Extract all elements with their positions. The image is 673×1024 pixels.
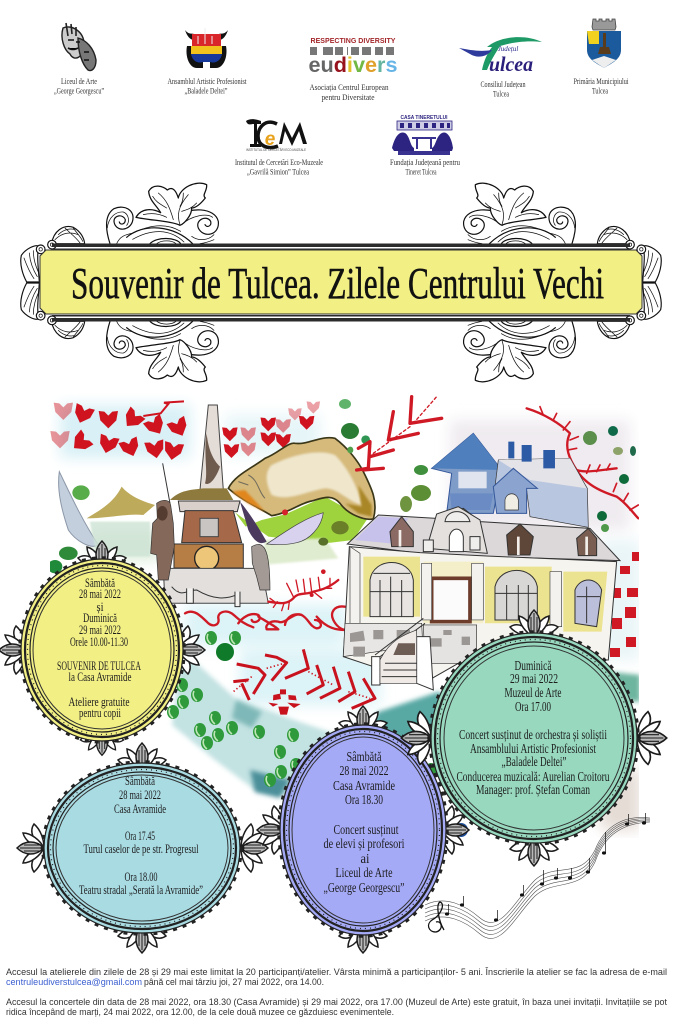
panel: yellow oval xyxy=(0,541,205,755)
label: Primăria Municipiului: Primăria Municipiului xyxy=(574,77,629,86)
text: yellow oval: SOUVENIR DE TULCEA xyxy=(57,658,141,673)
footer notes: Accesul la concertele din data de 28 mai 2022, ora 18.30 (Casa Avramide) și 29 mai 2022, ora 17.00 (Muzeul de Arte) este gratuit, în baza unei invitații. Invitațiile se pot xyxy=(6,997,667,1007)
text: yellow oval: Duminică xyxy=(83,610,117,625)
text: lavender oval: ai xyxy=(360,852,370,867)
text: blue oval xyxy=(79,773,203,897)
text: green oval: Muzeul de Arte xyxy=(504,686,562,701)
logo: Județul Tulcea: ulcea xyxy=(489,52,533,76)
text: blue oval: Casa Avramide xyxy=(114,801,166,816)
footer notes: până cel mai târziu joi, 27 mai 2022, ora 14.00. xyxy=(144,977,324,987)
logo: Casa Tineretului: CASA TINERETULUI xyxy=(400,115,448,121)
text: yellow oval: pentru copii xyxy=(79,705,121,720)
text: lavender oval: de elevi și profesori xyxy=(324,837,405,852)
text: green oval: Duminică xyxy=(514,659,552,674)
text: yellow oval: Orele 10.00-11.30 xyxy=(70,634,128,649)
logo: eudivers: RESPECTING DIVERSITY xyxy=(310,36,396,45)
text: yellow oval: Sâmbătă xyxy=(85,575,115,590)
text: green oval: Concert susținut de orchestra și soliștii xyxy=(459,728,607,743)
frame ornaments xyxy=(0,541,205,755)
title banner xyxy=(21,183,661,382)
label: Primăria Municipiului xyxy=(574,77,629,96)
label: Fundația Județeană pentru Tineret xyxy=(390,158,460,176)
text: green oval: 29 mai 2022 xyxy=(510,672,558,687)
text: blue oval: Sâmbătă xyxy=(125,773,155,788)
water band with lily pads xyxy=(167,631,640,798)
monument xyxy=(151,405,323,607)
frame ornaments xyxy=(401,610,667,866)
text: lavender oval: „George Georgescu” xyxy=(324,881,404,896)
logo: ICEM: INSTITUTUL DE CERCETĂRI ECO-MUZEALE xyxy=(246,148,307,152)
green leaves xyxy=(339,399,636,532)
banner yellow plate xyxy=(40,250,642,314)
music notes xyxy=(445,813,646,921)
label: Ansamblul Artistic Profesionist xyxy=(168,77,247,96)
text: yellow oval: 28 mai 2022 xyxy=(79,586,121,601)
label: Ansamblul Artistic Profesionist: „Baladele Deltei” xyxy=(184,86,228,96)
text: blue oval: Ora 18.00 xyxy=(124,869,158,884)
text: green oval: Manager: prof. Ștefan Coman xyxy=(476,783,590,798)
pale washes xyxy=(60,405,640,830)
frame ornaments xyxy=(17,743,268,953)
footer notes: centruleudiverstulcea@gmail.com xyxy=(6,977,142,987)
logo: Județul Tulcea: Județul xyxy=(498,45,518,53)
house: blue tower xyxy=(432,433,588,527)
label: Liceul de Arte xyxy=(54,77,104,96)
panel: lavender oval xyxy=(257,706,469,953)
logo: eudivers: eudivers xyxy=(308,54,398,77)
logo: theatre masks xyxy=(62,23,96,71)
text: blue oval: 28 mai 2022 xyxy=(119,787,161,802)
label: Asociația Centrul European xyxy=(310,83,388,102)
label: Institutul de Cercetări Eco-Muzeale xyxy=(235,158,323,176)
logo: Baladele Deltei xyxy=(185,28,228,68)
panel: green oval xyxy=(401,610,667,866)
text: lavender oval: Concert susținut xyxy=(334,823,399,838)
label: Institutul de Cercetări Eco-Muzeale: „Gavrilă Simion” Tulcea xyxy=(247,168,309,176)
text: blue oval: Teatru stradal „Serată la Avramide” xyxy=(79,882,203,897)
logo: Tulcea coat of arms xyxy=(587,19,621,68)
red tiles xyxy=(610,552,639,657)
red branch, upper centre xyxy=(357,397,442,470)
panel: blue oval xyxy=(17,743,268,953)
logo: Casa Tineretului xyxy=(392,115,453,155)
house: mansion xyxy=(343,507,620,690)
folk ornaments: scroll, branch, arrows xyxy=(185,569,375,715)
text: green oval: Ora 17.00 xyxy=(515,700,551,715)
text: yellow oval: 29 mai 2022 xyxy=(79,622,121,637)
logo: Județul Tulcea xyxy=(459,37,542,76)
dark blue blot xyxy=(458,823,468,837)
footer notes: Accesul la atelierele din zilele de 28 și 29 mai este limitat la 20 participanți/atelier. Vârsta minimă a participanților- 5 ani. Înscrierile la atelier se fac la adresa de e-mail xyxy=(6,967,667,977)
text: lavender oval: 28 mai 2022 xyxy=(340,764,388,779)
red ornaments xyxy=(185,397,639,715)
label: Institutul de Cercetări Eco-Muzeale: Institutul de Cercetări Eco-Muzeale xyxy=(235,158,323,167)
label: Consiliul Județean: Consiliul Județean xyxy=(480,80,526,89)
label: Asociația Centrul European: pentru Diversitate xyxy=(322,93,375,102)
red hearts motif xyxy=(50,401,320,462)
label: Consiliul Județean: Tulcea xyxy=(493,90,509,98)
footer notes: ridica începând de marți, 24 mai 2022, ora 12.00, de la cele două muzee ce găzduiesc evenimentele. xyxy=(6,1007,394,1017)
text: yellow oval xyxy=(57,575,141,720)
text: yellow oval: și xyxy=(96,599,104,614)
label: Asociația Centrul European: Asociația Centrul European xyxy=(310,83,388,92)
label: Ansamblul Artistic Profesionist: Ansamblul Artistic Profesionist xyxy=(168,77,247,86)
red branch, upper right xyxy=(527,407,638,518)
banner frame lines xyxy=(52,244,630,322)
treble clef xyxy=(429,902,444,932)
logo: eudivers xyxy=(308,36,398,77)
label: Fundația Județeană pentru Tineret: Tineret Tulcea xyxy=(406,168,437,176)
label: Liceul de Arte: „George Georgescu” xyxy=(54,86,104,96)
text: lavender oval xyxy=(324,750,405,896)
banner scrollwork ornament xyxy=(21,183,661,382)
text: green oval: Ansamblului Artistic Profesionist xyxy=(470,742,596,757)
text: green oval: „Baladele Deltei” xyxy=(502,755,566,770)
footer notes xyxy=(6,967,667,1017)
mountain and left spire xyxy=(48,472,155,573)
text: lavender oval: Casa Avramide xyxy=(333,779,395,794)
music staff xyxy=(425,813,650,939)
text: green oval xyxy=(456,659,610,798)
text: yellow oval: Ateliere gratuite xyxy=(68,694,130,709)
label: Liceul de Arte: Liceul de Arte xyxy=(61,77,97,86)
logo: ICEM: e xyxy=(265,129,276,150)
logos xyxy=(54,19,629,176)
text: blue oval: Ora 17.45 xyxy=(125,828,155,843)
text: blue oval: Turul caselor de pe str. Progresul xyxy=(84,841,199,856)
text: lavender oval: Ora 18.30 xyxy=(345,793,383,808)
label: Fundația Județeană pentru Tineret: Fundația Județeană pentru xyxy=(390,158,460,167)
text: yellow oval: la Casa Avramide xyxy=(68,669,132,684)
text: lavender oval: Liceul de Arte xyxy=(336,866,392,881)
label: Consiliul Județean xyxy=(480,80,526,98)
label: Primăria Municipiului: Tulcea xyxy=(592,86,608,96)
watercolor illustration xyxy=(48,397,640,837)
frame ornaments xyxy=(257,706,469,953)
text: lavender oval: Sâmbătă xyxy=(346,750,382,765)
rock with green xyxy=(228,423,375,565)
logo: ICEM xyxy=(246,119,307,152)
